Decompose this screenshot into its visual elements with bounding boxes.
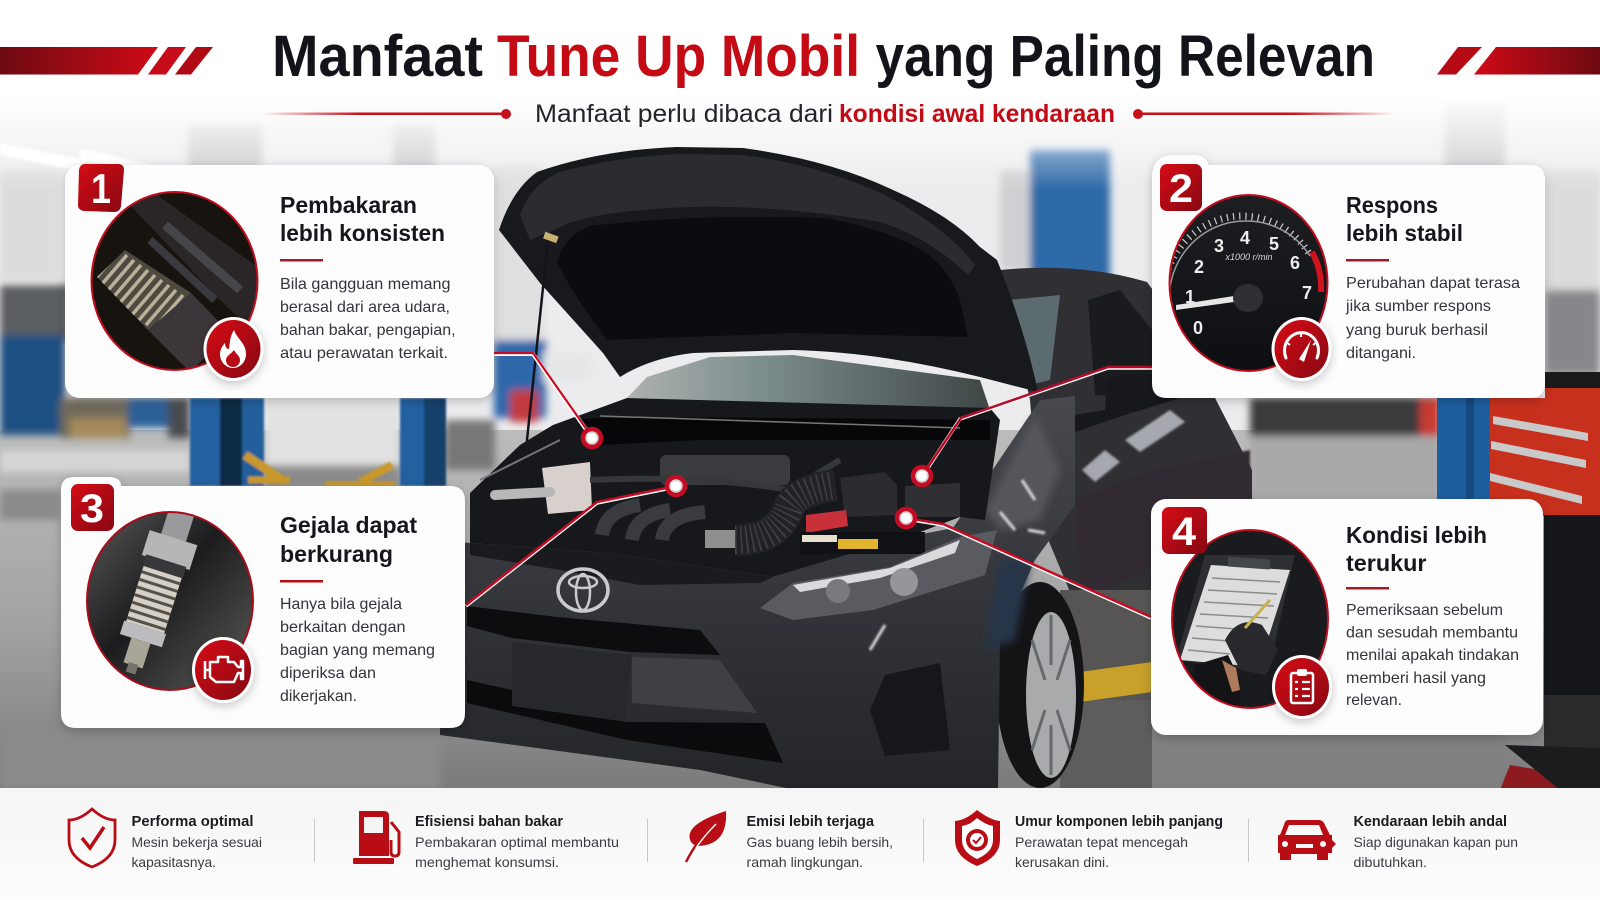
card 2 heading <box>1346 192 1463 246</box>
photo: tachometer: 4 <box>1240 228 1250 248</box>
subtitle line left <box>262 109 511 119</box>
fog lamp <box>870 663 950 756</box>
engine top cover <box>660 455 790 485</box>
photo: tachometer: 7 <box>1302 283 1312 303</box>
panel: card 4 <box>1151 499 1543 735</box>
hood shut panel <box>470 543 773 585</box>
photo: tachometer: 1 <box>1185 287 1195 307</box>
icon: component shield <box>955 810 1000 866</box>
icon: car <box>1278 820 1336 860</box>
number badge 3 <box>71 484 114 531</box>
workshop floor <box>0 430 1600 790</box>
subtitle line right <box>1133 109 1395 119</box>
card 3 heading: berkurang <box>280 541 393 567</box>
card 1 body: berasal dari area udara, <box>280 299 450 316</box>
title: Tune Up Mobil <box>497 24 860 89</box>
benefit 3 text: ramah lingkungan. <box>746 854 863 870</box>
number badge 1 <box>78 164 124 212</box>
callout line 4 <box>906 518 1151 618</box>
panel: card 3 <box>61 477 465 728</box>
benefit 3 text <box>746 813 893 870</box>
card 3 heading <box>280 512 417 567</box>
fender reflections <box>985 415 1060 530</box>
side mirror <box>1075 373 1190 432</box>
benefit 1 text <box>132 813 262 870</box>
number badge 3: 3 <box>80 487 104 531</box>
benefit 3 text: Emisi lebih terjaga <box>746 813 875 830</box>
benefit 5 text: Siap digunakan kapan pun <box>1354 834 1518 850</box>
icon: check engine <box>192 637 254 703</box>
number badge 4 <box>1162 507 1207 554</box>
marker 3 <box>665 475 687 497</box>
card 1 body: atau perawatan terkait. <box>280 345 448 362</box>
hood frame band <box>520 154 975 275</box>
card 1 heading: Pembakaran <box>280 192 417 218</box>
bottom benefit strip <box>0 788 1600 900</box>
photo: spark plug <box>88 513 252 689</box>
marker 1 <box>581 427 603 449</box>
windshield <box>627 355 990 410</box>
benefit 5 text <box>1354 813 1518 870</box>
marker 4 <box>895 507 917 529</box>
number badge 1: 1 <box>91 165 111 212</box>
benefit 3 text: Gas buang lebih bersih, <box>746 834 893 850</box>
lift pillars <box>190 398 446 486</box>
fuse box <box>840 472 897 517</box>
alloy wheel <box>1026 612 1076 778</box>
icon: flame <box>204 317 264 381</box>
hood <box>499 147 1038 392</box>
card 4 body <box>1346 602 1519 709</box>
title: yang Paling Relevan <box>876 24 1375 89</box>
card 4 heading <box>1346 522 1487 576</box>
number badge 2: 2 <box>1169 167 1193 211</box>
tyre <box>996 582 1084 788</box>
card 3 body: Hanya bila gejala <box>280 596 402 613</box>
card 4 body: dan sesudah membantu <box>1346 624 1518 642</box>
benefit 1 text: Performa optimal <box>132 813 254 830</box>
benefit 2 text: Pembakaran optimal membantu <box>415 834 619 850</box>
card 4 body: Pemeriksaan sebelum <box>1346 602 1503 619</box>
benefit 4 text: kerusakan dini. <box>1015 854 1109 870</box>
benefit 2 text: menghemat konsumsi. <box>415 854 559 870</box>
icon: checklist <box>1272 655 1332 719</box>
benefit 4 text <box>1015 813 1223 870</box>
photo: tachometer: 0 <box>1193 318 1203 338</box>
card 2 body <box>1345 275 1520 362</box>
photo: tachometer: 3 <box>1214 236 1224 256</box>
card 4 heading: Kondisi lebih <box>1346 522 1487 548</box>
card 1 body: bahan bakar, pengapian, <box>280 322 456 339</box>
battery <box>800 532 925 554</box>
air duct <box>735 485 835 540</box>
card 3 body <box>280 596 435 705</box>
photo: tachometer <box>1170 196 1326 370</box>
photo: tachometer: x1000 r/min <box>1224 252 1273 262</box>
car rear and door <box>1000 268 1252 640</box>
marker 2 <box>911 465 933 487</box>
benefit 1 text: Mesin bekerja sesuai <box>132 834 262 850</box>
card 2 body: jika sumber respons <box>1345 298 1491 315</box>
subtitle: kondisi awal kendaraan <box>839 100 1115 128</box>
intake runners <box>602 505 705 540</box>
benefit 4 text: Umur komponen lebih panjang <box>1015 813 1223 830</box>
body sides <box>1075 450 1250 600</box>
title <box>272 24 1375 89</box>
right cabinet <box>1437 372 1600 790</box>
lower grille <box>467 680 783 763</box>
number badge 4: 4 <box>1172 510 1197 554</box>
battery box <box>905 483 960 517</box>
icon: speedometer <box>1272 317 1332 381</box>
card 2 body: yang buruk berhasil <box>1346 322 1488 339</box>
benefit 5 text: Kendaraan lebih andal <box>1354 813 1507 830</box>
cowl and engine bay <box>470 398 1000 577</box>
card 2 heading: Respons <box>1346 192 1438 218</box>
number badge 2 <box>1160 164 1202 211</box>
headlight <box>760 530 997 620</box>
callout line 1 <box>494 353 592 438</box>
title: Manfaat <box>272 24 483 89</box>
hood inner liner <box>557 217 968 340</box>
benefit 5 text: dibutuhkan. <box>1354 854 1427 870</box>
door reflections <box>1082 410 1185 482</box>
icon: shield check <box>69 809 115 867</box>
Toyota emblem <box>558 569 608 611</box>
card 3 body: dikerjakan. <box>280 688 357 705</box>
card 4 body: relevan. <box>1346 692 1402 709</box>
card 2 heading: lebih stabil <box>1346 220 1463 246</box>
coolant tank <box>542 462 592 514</box>
bumper panel right of plate <box>632 657 757 713</box>
photo: tachometer: 2 <box>1194 257 1204 277</box>
photo: tachometer: 5 <box>1269 234 1279 254</box>
panel: card 2 <box>1152 155 1545 398</box>
subtitle: Manfaat perlu dibaca dari <box>535 100 833 128</box>
benefit 1 text: kapasitasnya. <box>132 854 216 870</box>
benefit 2 text: Efisiensi bahan bakar <box>415 813 563 830</box>
side window <box>1088 290 1152 400</box>
card 1 heading <box>280 192 445 246</box>
card 2 body: Perubahan dapat terasa <box>1346 275 1520 292</box>
card 4 body: memberi hasil yang <box>1346 670 1486 687</box>
panel: card 1 <box>65 164 494 398</box>
license plate <box>512 642 632 723</box>
benefit 2 text <box>415 813 619 870</box>
photo: tachometer: 6 <box>1290 253 1300 273</box>
callout line 2 <box>922 367 1152 477</box>
icon: leaf <box>686 811 726 862</box>
card 1 body <box>280 276 456 362</box>
card 3 heading: Gejala dapat <box>280 512 417 538</box>
card 3 body: berkaitan dengan <box>280 619 406 636</box>
battery cover red <box>806 510 848 535</box>
under car and jack <box>1060 590 1152 740</box>
photo: inspection clipboard <box>1173 531 1327 707</box>
card 3 body: bagian yang memang <box>280 642 435 659</box>
upper grille band <box>467 606 720 655</box>
card 4 body: menilai apakah tindakan <box>1346 647 1519 664</box>
car <box>440 147 1252 788</box>
top ribbon left <box>0 47 213 74</box>
photo: air filter <box>90 190 262 375</box>
card 4 heading: terukur <box>1346 550 1427 576</box>
benefit 4 text: Perawatan tepat mencegah <box>1015 834 1188 850</box>
card 1 body: Bila gangguan memang <box>280 276 450 293</box>
shop lights <box>0 143 150 175</box>
coolant hose <box>495 492 550 495</box>
hood strut <box>524 240 548 540</box>
card 3 body: diperiksa dan <box>280 665 376 682</box>
icon: fuel pump <box>353 811 399 864</box>
fender and front corner <box>440 396 1075 788</box>
card 2 body: ditangani. <box>1346 345 1416 362</box>
subtitle <box>535 100 1115 128</box>
top ribbon right <box>1437 47 1600 74</box>
callout line 3 <box>466 486 676 606</box>
card 1 heading: lebih konsisten <box>280 220 445 246</box>
